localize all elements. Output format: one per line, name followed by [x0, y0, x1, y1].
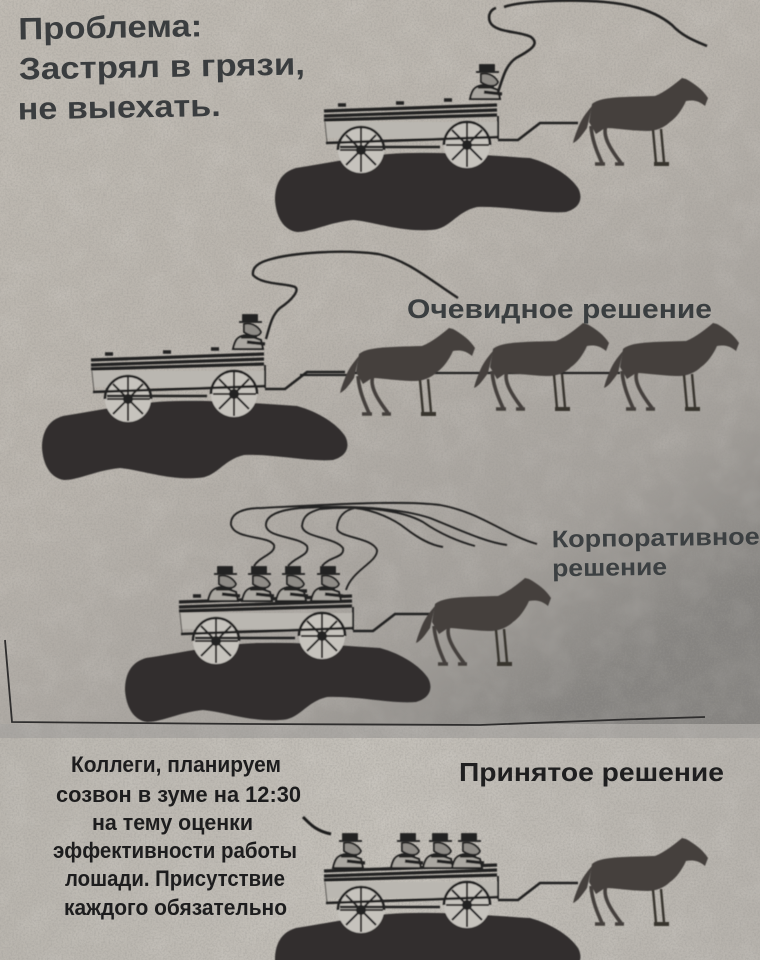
- speech text: zoom call: [53, 752, 301, 920]
- scene 3: four drivers, four whips, one horse: [125, 503, 551, 722]
- drivers 3: [208, 567, 343, 601]
- speech text: zoom call: на тему оценки: [92, 810, 253, 835]
- mud patch 1: [275, 153, 580, 232]
- horse 4: [573, 838, 708, 924]
- speech tick: [303, 817, 331, 834]
- heading: problem: не выехать.: [17, 88, 221, 126]
- speech text: zoom call: созвон в зуме на 12:30: [56, 782, 301, 807]
- divider band: [0, 724, 760, 739]
- heading: problem: Проблема:: [18, 8, 203, 46]
- label: accepted solution: Принятое решение: [459, 757, 724, 787]
- label: corporate solution: Корпоративное: [552, 523, 760, 553]
- whips 3: [231, 503, 537, 590]
- scene 2: three horses: [42, 252, 739, 480]
- background: bottom paper panel: [0, 738, 760, 960]
- traces between horses: [300, 373, 620, 375]
- scene 1: single driver and one horse: [275, 1, 708, 232]
- heading: problem: [16, 6, 306, 126]
- speech text: zoom call: каждого обязательно: [64, 895, 287, 920]
- scene 4: accepted solution, four drivers and a horse: [275, 817, 708, 960]
- speech text: zoom call: лошади. Присутствие: [65, 866, 285, 891]
- speech text: zoom call: эффективности работы: [53, 838, 297, 863]
- horse 2a: [340, 328, 475, 414]
- wagon 3: [179, 591, 433, 664]
- horse 2c: [604, 323, 739, 409]
- wagon 2: [91, 349, 345, 422]
- whip 2: [253, 252, 458, 339]
- mud patch 4: [275, 913, 580, 960]
- wagon 1: [324, 100, 578, 173]
- whip 1: [489, 1, 707, 92]
- wagon 4: [324, 860, 578, 933]
- heading: problem: Застрял в грязи,: [19, 46, 305, 86]
- horse 2b: [474, 323, 609, 409]
- label: corporate solution: [552, 523, 760, 582]
- mud patch 2: [42, 401, 347, 480]
- driver 2: [233, 315, 265, 349]
- drivers 4: [333, 834, 484, 868]
- horse 3: [416, 578, 551, 664]
- driver 1: [470, 65, 502, 99]
- background: top paper panel: [0, 0, 760, 726]
- label: corporate solution: решение: [552, 554, 667, 582]
- horse 1: [573, 78, 708, 164]
- speech text: zoom call: Коллеги, планируем: [71, 752, 281, 777]
- label: obvious solution: Очевидное решение: [407, 294, 712, 324]
- mud patch 3: [125, 643, 430, 722]
- panel frame lines: [5, 640, 705, 725]
